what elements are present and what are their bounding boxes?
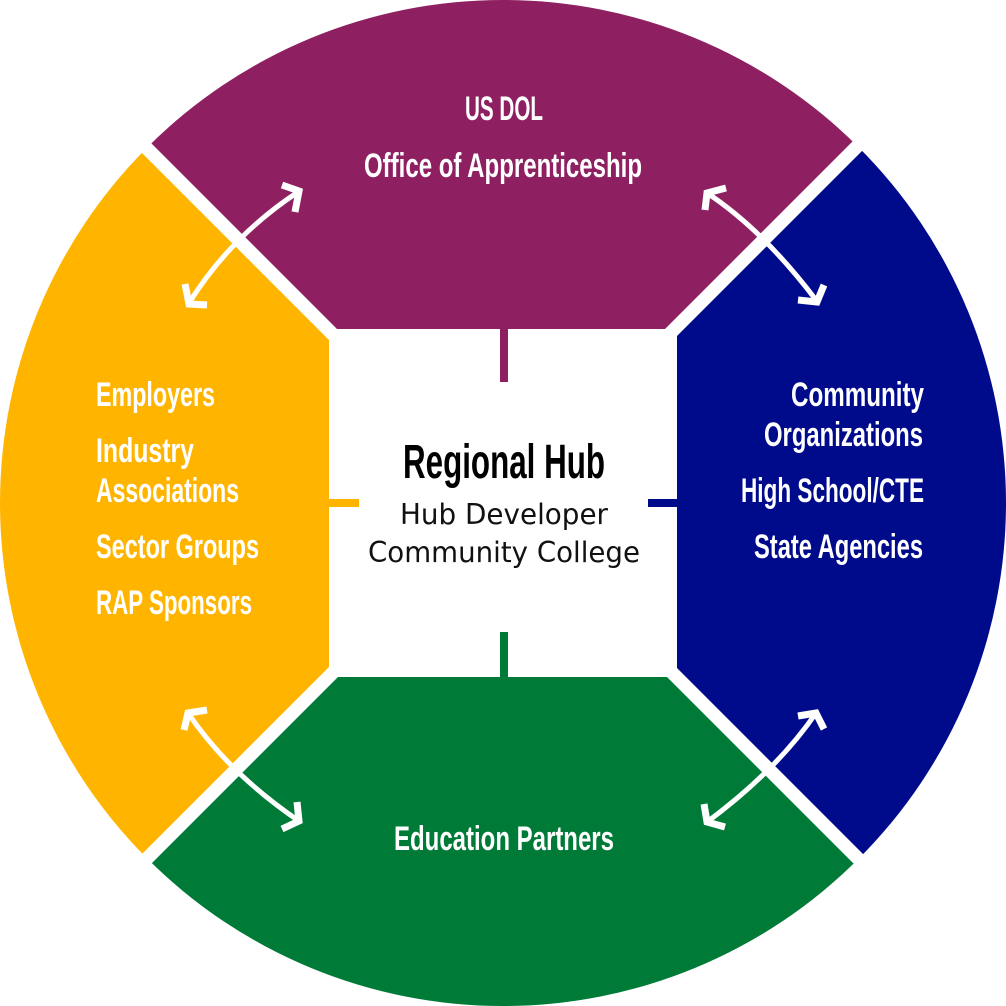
label: Organizations: Organizations	[764, 416, 923, 454]
segment shape: gold	[0, 153, 329, 854]
arrow: top right double-headed	[705, 188, 824, 302]
arrow: bottom left double-headed	[184, 710, 299, 829]
label: State Agencies: State Agencies	[754, 528, 923, 566]
panel: community partners	[648, 150, 1006, 854]
label: Office of Apprenticeship: Office of Apprenticeship	[364, 147, 642, 185]
arrow: top left double-headed	[185, 185, 299, 305]
connector tick: top	[500, 325, 508, 382]
label: RAP Sponsors: RAP Sponsors	[96, 584, 252, 622]
panel: industry partners	[0, 153, 359, 854]
connector tick: bottom	[500, 632, 508, 681]
panel: Education Partners	[152, 632, 854, 1006]
arrow: bottom right double-headed	[704, 713, 824, 827]
subheading: Hub Developer: Hub Developer	[400, 498, 608, 531]
label: Sector Groups: Sector Groups	[96, 528, 259, 566]
subheading: Community College: Community College	[368, 536, 640, 569]
panel: US DOL	[151, 0, 852, 382]
connector tick: left	[325, 499, 359, 507]
label: Employers: Employers	[96, 376, 215, 414]
segment shape: navy	[677, 150, 1006, 854]
label: Education Partners: Education Partners	[394, 820, 614, 858]
center text: Regional Hub	[368, 436, 640, 569]
connector tick: right	[648, 499, 681, 507]
label: Community: Community	[791, 376, 924, 414]
label: US DOL: US DOL	[465, 90, 543, 128]
segment shape: green	[152, 677, 854, 1006]
segment shape: purple	[151, 0, 852, 329]
label: Industry: Industry	[96, 432, 194, 470]
heading: Regional Hub: Regional Hub	[403, 436, 605, 489]
label: Associations: Associations	[96, 472, 239, 510]
